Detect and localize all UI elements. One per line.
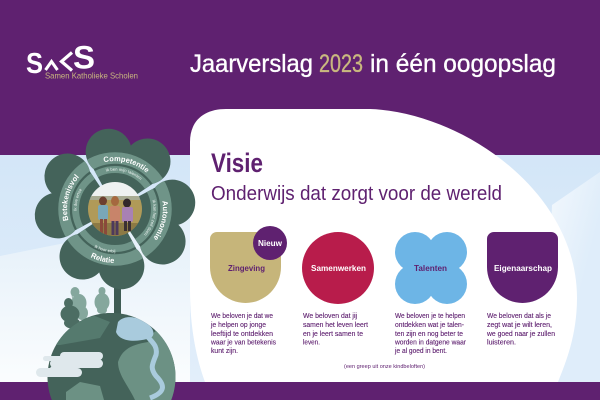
- promise: Samenwerken: [302, 232, 374, 346]
- ring sublabels: [74, 168, 156, 254]
- text: Zingeving promise: je helpen op jonge: [210, 322, 266, 329]
- logo tagline: Samen Katholieke Scholen: [45, 70, 138, 80]
- ring labels: Autonomie: [154, 201, 168, 240]
- text: Eigenaarschap promise: zegt wat je wilt leren,: [487, 322, 552, 329]
- header band: [0, 0, 600, 155]
- photo: three children: [88, 182, 142, 237]
- text: Zingeving promise: We beloven je dat we: [211, 313, 273, 320]
- badge: Nieuw: Nieuw: [258, 239, 283, 248]
- ring sublabels: Ik ben mijn talenten: [106, 168, 142, 180]
- logo wordmark: S: [73, 40, 95, 76]
- illustration: clover with rings: [34, 128, 196, 290]
- promise: Eigenaarschap: [486, 232, 558, 346]
- text: Zingeving promise: waar je van betekenis: [210, 340, 276, 346]
- bottom band: [0, 382, 600, 400]
- label: Talenten: Talenten: [414, 263, 447, 273]
- title: Jaarverslag: [190, 50, 313, 78]
- text: Talenten promise: ten zijn en nog beter te: [395, 331, 463, 338]
- cloud: [36, 352, 103, 377]
- text: Eigenaarschap promise: We beloven dat als je: [487, 313, 551, 320]
- ring sublabels: Ik kan het zelf doen: [144, 200, 156, 236]
- globe: [47, 313, 176, 400]
- label: Samenwerken: Samenwerken: [311, 263, 366, 273]
- title: [190, 50, 556, 78]
- title: 2023: [319, 50, 363, 78]
- text: Samenwerken promise: [303, 313, 368, 346]
- shape: Samenwerken: [302, 232, 374, 304]
- ring labels: [62, 156, 168, 263]
- label: Zingeving: Zingeving: [228, 263, 265, 273]
- text: Talenten promise: We beloven je te helpen: [395, 313, 465, 320]
- ring labels: Relatie: [90, 252, 114, 263]
- shape: Zingeving: [210, 232, 281, 303]
- text: Eigenaarschap promise: luisteren.: [487, 340, 516, 346]
- text: Zingeving promise: leeftijd te ontdekken: [211, 331, 273, 338]
- text: Zingeving promise: kunt zijn.: [211, 348, 238, 355]
- ring labels: Betekenisvol: [62, 174, 79, 221]
- logo: SAKS: [26, 40, 138, 80]
- promise: Zingeving: [210, 226, 287, 355]
- background: light blue sky: [0, 150, 600, 385]
- rings: [64, 158, 166, 260]
- text: Eigenaarschap promise: we goed naar je zullen: [486, 331, 555, 338]
- illustration: globe with trees: [36, 280, 176, 400]
- text: Talenten promise: worden in datgene waar: [394, 340, 467, 346]
- footnote: (een greep uit onze kindbeloften): [344, 364, 425, 370]
- text: Samenwerken promise: samen het leven leert: [303, 322, 368, 329]
- text: Samenwerken promise: leven.: [303, 340, 320, 346]
- small trees: [60, 287, 110, 333]
- promise: Talenten: [394, 232, 467, 355]
- text: Eigenaarschap promise: [486, 313, 555, 346]
- shape: Eigenaarschap: [487, 232, 558, 303]
- label: Eigenaarschap: Eigenaarschap: [494, 263, 552, 273]
- logo wordmark: [26, 40, 95, 80]
- white content panel: [190, 109, 577, 382]
- text: Zingeving promise: [210, 313, 276, 355]
- ring sublabels: Ik hoor erbij: [94, 244, 116, 254]
- text: Samenwerken promise: en je leert samen te: [303, 331, 363, 338]
- text: Samenwerken promise: We beloven dat jij: [303, 313, 357, 320]
- title: in één oogopslag: [370, 50, 556, 78]
- heading: Visie: Visie: [211, 148, 263, 178]
- text: Talenten promise: ontdekken wat je talen-: [395, 322, 465, 329]
- shape: Talenten: [395, 232, 467, 304]
- text: Talenten promise: [394, 313, 467, 355]
- ring labels: Competentie: [104, 156, 148, 172]
- logo wordmark: S: [26, 48, 43, 80]
- subheading: Onderwijs dat zorgt voor de wereld: [211, 183, 502, 205]
- ring sublabels: Ik doe ertoe: [74, 188, 82, 210]
- clover petals: [30, 124, 200, 294]
- tree trunk: [114, 280, 121, 316]
- text: Talenten promise: je al goed in bent.: [394, 348, 447, 355]
